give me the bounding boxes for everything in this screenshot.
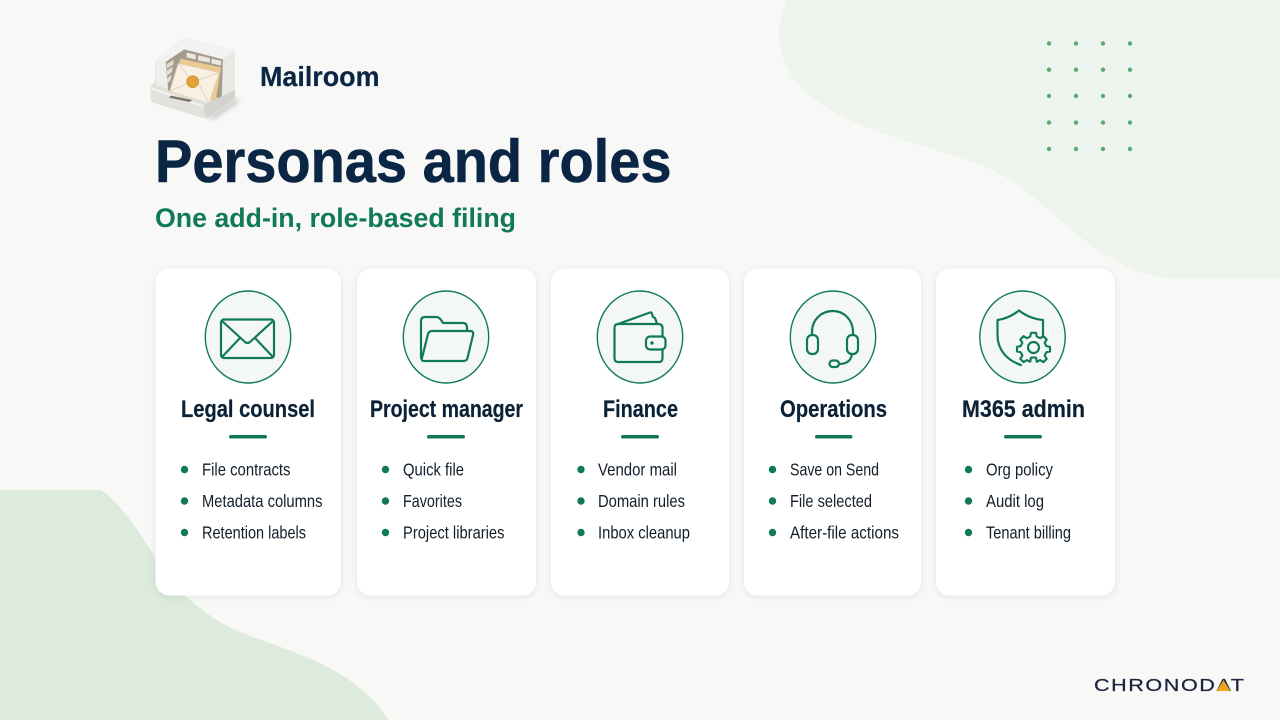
heading: Operations xyxy=(780,396,887,423)
panel: M365 admin xyxy=(936,268,1115,596)
heading: M365 admin xyxy=(962,396,1085,423)
background blob: bottom left xyxy=(0,490,388,720)
bullet list: File selected xyxy=(790,491,872,511)
bullet list: Org policy xyxy=(986,460,1053,480)
heading: Finance xyxy=(603,396,678,423)
icon: amber triangle in logo xyxy=(1216,680,1230,691)
bullet list: Vendor mail xyxy=(598,460,677,480)
icon: shield with gear xyxy=(980,291,1065,383)
bullet list xyxy=(181,460,323,542)
bullet list xyxy=(382,460,505,542)
bullet list xyxy=(577,460,690,542)
heading: Legal counsel xyxy=(181,396,315,423)
bullet list: Metadata columns xyxy=(202,491,323,511)
icon: wallet xyxy=(597,291,683,383)
panel: Project manager xyxy=(357,268,536,596)
bullet list: Favorites xyxy=(403,491,462,511)
bullet list: Tenant billing xyxy=(986,522,1071,542)
subtitle: One add-in, role-based filing xyxy=(155,203,516,233)
bullet list: Domain rules xyxy=(598,491,685,511)
logo: Chronodat: CHRONODAT xyxy=(1094,676,1244,696)
icon: headset xyxy=(790,291,876,383)
icon: folder xyxy=(403,291,489,383)
panel: Finance xyxy=(551,268,729,596)
bullet list: File contracts xyxy=(202,460,291,480)
bullet list: After-file actions xyxy=(790,522,899,542)
background blob: top right xyxy=(779,0,1280,279)
icon: mailroom tray with envelope xyxy=(150,38,240,120)
panel: Legal counsel xyxy=(156,268,341,596)
panel: Operations xyxy=(744,268,921,596)
bullet list: Retention labels xyxy=(202,522,306,542)
dot grid decoration xyxy=(1047,41,1132,151)
bullet list: Audit log xyxy=(986,491,1044,511)
bullet list: Project libraries xyxy=(403,522,505,542)
title: Personas and roles xyxy=(155,128,672,195)
bullet list xyxy=(965,460,1071,542)
bullet list: Quick file xyxy=(403,460,464,480)
heading: Project manager xyxy=(370,396,523,423)
bullet list: Inbox cleanup xyxy=(598,522,690,542)
bullet list: Save on Send xyxy=(790,460,879,480)
bullet list xyxy=(769,460,899,542)
icon: envelope xyxy=(205,291,291,383)
brand name: Mailroom xyxy=(260,61,380,92)
